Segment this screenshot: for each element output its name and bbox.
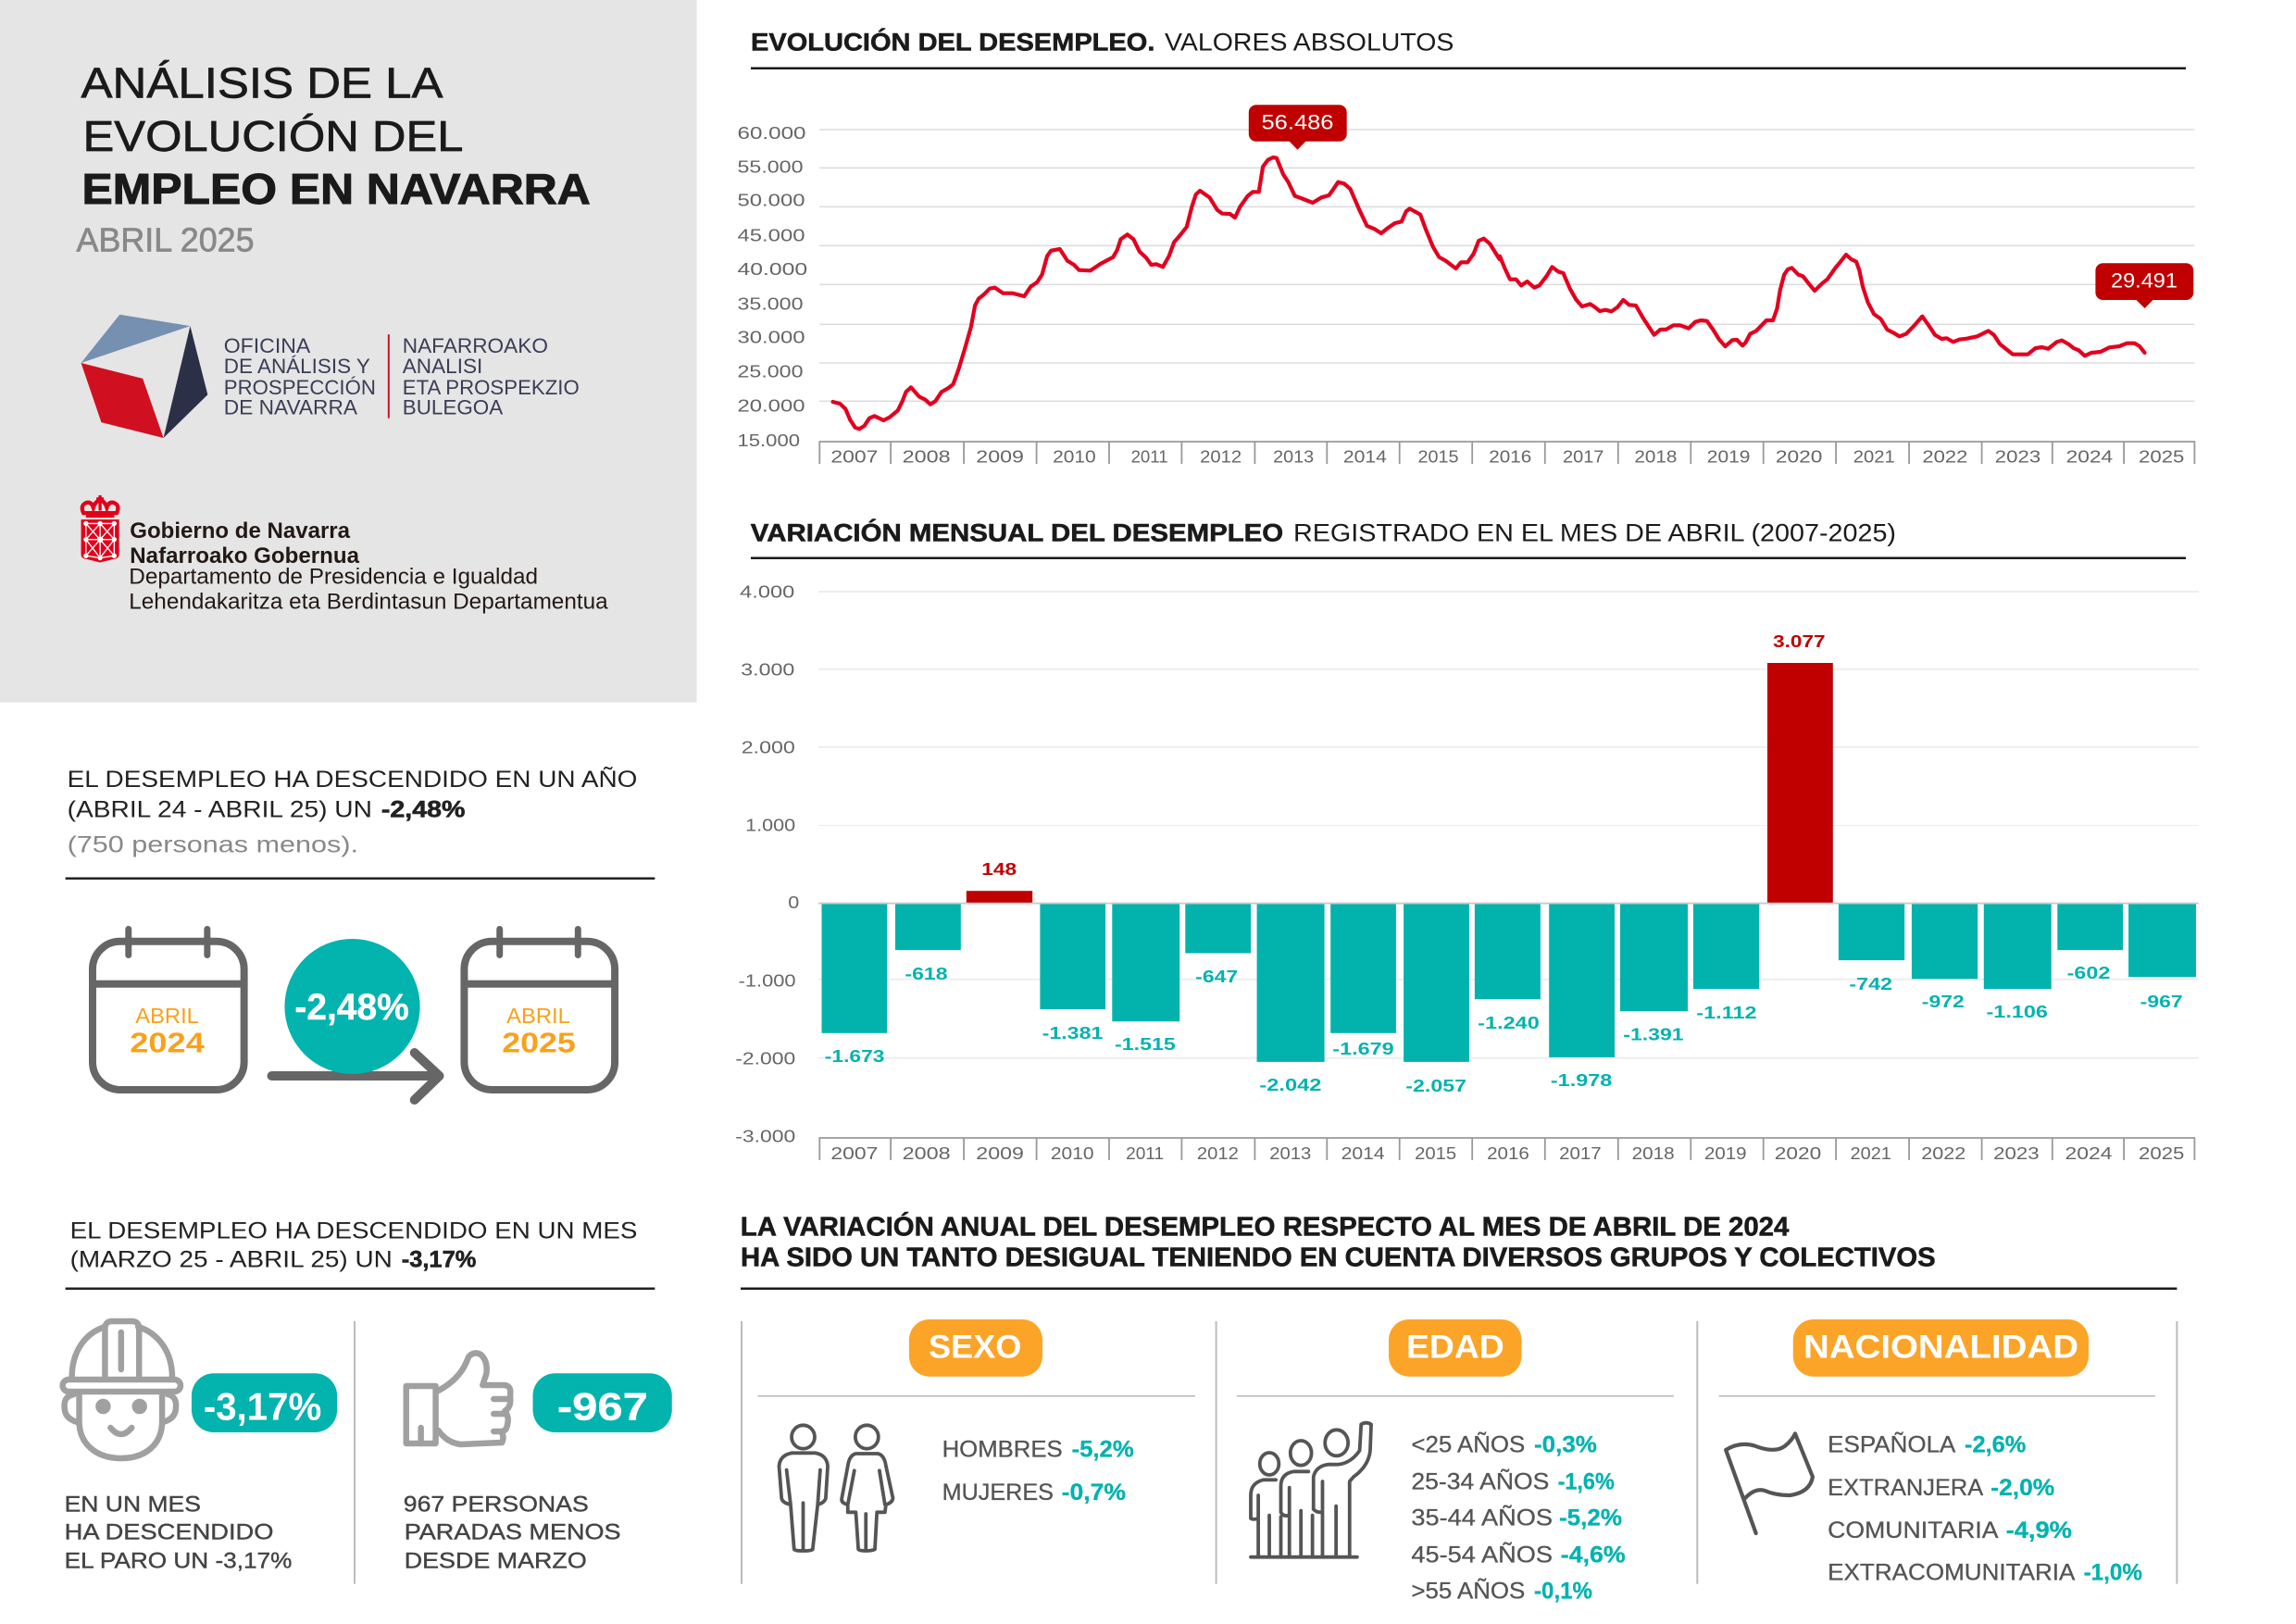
x axis with year ticks: 2009 <box>976 447 1024 466</box>
bar value labels: -618 <box>905 964 948 983</box>
x axis with year ticks: 2010 <box>1051 1143 1094 1163</box>
text block: sexo values: -0,7% <box>1062 1480 1126 1505</box>
icon: calendar April 2025 <box>464 926 617 1090</box>
y axis labels: -2.000 <box>735 1050 795 1068</box>
government name: Gobierno de Navarra <box>130 518 351 543</box>
title: EVOLUCIÓN DEL <box>83 112 463 160</box>
text block: edad values: 35-44 AÑOS <box>1411 1505 1553 1531</box>
text block: sexo values: MUJERES <box>942 1480 1054 1505</box>
icon: calendar April 2025: 2025 <box>502 1027 576 1059</box>
text block: edad values: <25 AÑOS <box>1411 1430 1525 1457</box>
text block: monthly people: PARADAS MENOS <box>405 1519 621 1544</box>
bar value labels: -967 <box>2140 992 2183 1011</box>
x axis with year ticks: 2022 <box>1922 447 1967 466</box>
bar value labels: 3.077 <box>1773 631 1826 651</box>
text block: edad values: >55 AÑOS <box>1411 1578 1525 1605</box>
text block: nacionalidad values: ESPAÑOLA <box>1828 1430 1956 1457</box>
text block: nacionalidad values: -4,9% <box>2006 1518 2072 1543</box>
y axis labels: 45.000 <box>737 226 805 244</box>
icon: calendar April 2024: ABRIL <box>135 1004 199 1028</box>
x axis with year ticks: 2021 <box>1850 1143 1891 1163</box>
x axis with year ticks: 2024 <box>2066 447 2113 466</box>
callout: latest value <box>2095 263 2193 308</box>
x axis with year ticks: 2019 <box>1707 447 1750 466</box>
x axis with year ticks: 2025 <box>2139 1143 2184 1163</box>
x axis with year ticks: 2012 <box>1200 447 1242 466</box>
bar value labels: -2.042 <box>1259 1075 1321 1094</box>
y axis labels: 60.000 <box>737 124 805 143</box>
x axis with year ticks <box>819 442 2194 466</box>
heading: monthly variation: REGISTRADO EN EL MES DE ABRIL (2007-2025) <box>1293 518 1896 546</box>
x axis with year ticks: 2017 <box>1563 447 1603 466</box>
bar chart: monthly variation <box>735 583 2199 1163</box>
government name: Nafarroako Gobernua <box>130 543 360 568</box>
y axis labels: 20.000 <box>737 397 805 416</box>
x axis with year ticks: 2015 <box>1415 1143 1456 1163</box>
badge: percentage <box>192 1373 337 1432</box>
text block: nacionalidad values: -2,0% <box>1990 1475 2054 1501</box>
text block: edad values: 45-54 AÑOS <box>1411 1541 1553 1568</box>
x axis with year ticks <box>819 1138 2194 1163</box>
government name: Departamento de Presidencia e Igualdad <box>129 565 538 590</box>
government name: Lehendakaritza eta Berdintasun Departamentua <box>129 590 608 615</box>
title <box>81 58 591 213</box>
x axis with year ticks: 2007 <box>830 1143 878 1163</box>
y axis labels: 1.000 <box>745 817 795 835</box>
bar value labels: -1.515 <box>1115 1034 1176 1054</box>
text block: edad values: -4,6% <box>1561 1542 1626 1568</box>
office name: BULEGOA <box>403 396 503 419</box>
text block: edad values <box>1411 1430 1626 1605</box>
office name <box>224 334 580 419</box>
bar value labels: -647 <box>1195 967 1238 986</box>
date subtitle: ABRIL 2025 <box>77 222 255 259</box>
x axis with year ticks: 2014 <box>1341 1143 1385 1163</box>
text block: monthly people: 967 PERSONAS <box>404 1492 589 1517</box>
arrow and percentage circle <box>271 939 440 1100</box>
x axis with year ticks: 2011 <box>1131 447 1168 466</box>
office name: ETA PROSPEKZIO <box>403 376 580 399</box>
x axis with year ticks: 2023 <box>1993 1143 2040 1163</box>
bar value labels: -972 <box>1922 992 1965 1011</box>
y axis labels <box>737 124 807 450</box>
bar value labels: 148 <box>981 859 1017 879</box>
text block: yearly summary: (750 personas menos). <box>68 832 358 858</box>
heading: monthly variation: VARIACIÓN MENSUAL DEL DESEMPLEO <box>751 518 1283 546</box>
text block: monthly summary <box>66 1218 655 1290</box>
x axis with year ticks: 2024 <box>2065 1143 2113 1163</box>
text block: monthly percent: EN UN MES <box>65 1492 201 1517</box>
text block: edad values: -0,3% <box>1534 1431 1597 1457</box>
red bars <box>967 663 1833 903</box>
text block: edad values: 25-34 AÑOS <box>1411 1468 1549 1494</box>
bar value labels: -1.112 <box>1696 1003 1757 1022</box>
text block: edad values: -0,1% <box>1534 1579 1592 1605</box>
badge: edad <box>1389 1319 1522 1377</box>
badge: nacionalidad: NACIONALIDAD <box>1803 1330 2078 1365</box>
badge: sexo <box>909 1319 1042 1377</box>
callout: peak value <box>1249 105 1347 150</box>
data line <box>833 157 2145 429</box>
text block: monthly percent: EL PARO UN -3,17% <box>65 1549 292 1574</box>
y axis labels: 40.000 <box>737 260 807 279</box>
icon: Navarra coat of arms <box>81 495 119 563</box>
y axis labels <box>735 583 799 1145</box>
title: EMPLEO EN NAVARRA <box>82 165 591 213</box>
x axis with year ticks: 2009 <box>976 1143 1024 1163</box>
heading: annual variation by groups: LA VARIACIÓN ANUAL DEL DESEMPLEO RESPECTO AL MES DE ABRIL DE 2024 <box>741 1213 1790 1243</box>
x axis with year ticks: 2012 <box>1197 1143 1239 1163</box>
line chart: unemployment evolution <box>737 105 2194 466</box>
text block: nacionalidad values: EXTRACOMUNITARIA <box>1828 1560 2076 1586</box>
x axis with year ticks: 2013 <box>1273 447 1314 466</box>
text block: monthly percent: HA DESCENDIDO <box>65 1519 273 1544</box>
text block: yearly summary <box>66 766 655 880</box>
x axis with year ticks: 2018 <box>1634 447 1677 466</box>
text block: yearly summary: EL DESEMPLEO HA DESCENDIDO EN UN AÑO <box>68 766 637 793</box>
badge: nacionalidad <box>1793 1319 2089 1377</box>
x axis with year ticks: 2007 <box>830 447 878 466</box>
x axis with year ticks: 2010 <box>1053 447 1096 466</box>
x axis with year ticks: 2021 <box>1853 447 1895 466</box>
x axis with year ticks: 2020 <box>1776 447 1822 466</box>
text block: nacionalidad values: -1,0% <box>2084 1560 2142 1586</box>
office name: DE ANÁLISIS Y <box>224 355 370 378</box>
x axis with year ticks: 2008 <box>903 1143 951 1163</box>
y axis labels: 3.000 <box>741 661 794 680</box>
y axis labels: 35.000 <box>737 294 804 313</box>
bar value labels: -1.679 <box>1332 1039 1394 1058</box>
y axis labels: -3.000 <box>735 1127 795 1145</box>
government name <box>129 518 608 615</box>
text block: sexo values: -5,2% <box>1072 1436 1134 1462</box>
text block: monthly percent <box>65 1492 292 1574</box>
x axis with year ticks: 2008 <box>903 447 951 466</box>
callout: peak value: 56.486 <box>1261 110 1333 133</box>
office name: OFICINA <box>224 334 310 357</box>
bar value labels: -1.240 <box>1478 1013 1540 1032</box>
y axis labels: 4.000 <box>740 583 794 602</box>
x axis with year ticks: 2016 <box>1487 1143 1529 1163</box>
text block: nacionalidad values: -2,6% <box>1965 1431 2026 1457</box>
text block: nacionalidad values <box>1828 1430 2142 1586</box>
badge: sexo: SEXO <box>929 1330 1021 1365</box>
text block: monthly summary: (MARZO 25 - ABRIL 25) UN <box>70 1247 393 1273</box>
y axis labels: -1.000 <box>739 971 796 990</box>
y axis labels: 30.000 <box>737 329 805 347</box>
callout: latest value: 29.491 <box>2111 269 2177 293</box>
y axis labels: 0 <box>788 893 799 912</box>
y axis labels: 50.000 <box>737 191 805 209</box>
x axis with year ticks: 2023 <box>1995 447 2040 466</box>
text block: yearly summary: (ABRIL 24 - ABRIL 25) UN <box>68 797 372 823</box>
x axis with year ticks: 2016 <box>1489 447 1531 466</box>
bar value labels: -602 <box>2067 963 2110 982</box>
x axis with year ticks: 2025 <box>2139 447 2184 466</box>
text block: monthly people: DESDE MARZO <box>405 1549 587 1574</box>
text block: edad values: -1,6% <box>1558 1468 1615 1494</box>
icon: calendar April 2024: 2024 <box>130 1027 206 1059</box>
badge: edad: EDAD <box>1406 1330 1504 1365</box>
teal bars <box>822 904 2196 1062</box>
bar value labels: -1.106 <box>1987 1002 2048 1021</box>
x axis with year ticks: 2018 <box>1632 1143 1675 1163</box>
x axis with year ticks: 2015 <box>1418 447 1459 466</box>
icon: worker with helmet <box>63 1321 181 1458</box>
text block: yearly summary: -2,48% <box>381 797 465 823</box>
y axis labels: 25.000 <box>737 363 804 381</box>
icon: man and woman <box>779 1425 893 1551</box>
badge: people count: -967 <box>557 1384 648 1428</box>
text block: monthly people <box>404 1492 621 1574</box>
y axis labels: 55.000 <box>737 157 804 176</box>
text block: monthly summary: EL DESEMPLEO HA DESCENDIDO EN UN MES <box>70 1218 637 1243</box>
bar value labels: -1.381 <box>1042 1023 1103 1043</box>
icon: calendar April 2024 <box>92 926 245 1090</box>
bar value labels: -1.673 <box>825 1046 885 1066</box>
office name: NAFARROAKO <box>403 334 548 357</box>
icon: thumbs up <box>406 1353 510 1444</box>
office name: ANALISI <box>403 355 482 378</box>
text block: sexo values: HOMBRES <box>942 1436 1063 1462</box>
icon: group of people <box>1251 1423 1371 1557</box>
icon: office logo <box>81 315 207 438</box>
bar value labels: -2.057 <box>1405 1076 1466 1095</box>
heading: annual variation by groups: HA SIDO UN TANTO DESIGUAL TENIENDO EN CUENTA DIVERSOS GRUPOS Y COLECTIVOS <box>741 1243 1936 1273</box>
icon: flag <box>1726 1433 1813 1533</box>
panel: monthly change <box>63 1218 672 1584</box>
x axis with year ticks: 2022 <box>1921 1143 1965 1163</box>
office name: DE NAVARRA <box>224 396 357 419</box>
text block: nacionalidad values: COMUNITARIA <box>1828 1518 1999 1543</box>
heading: annual variation by groups <box>741 1213 2177 1290</box>
badge: people count <box>533 1373 672 1432</box>
heading: monthly variation <box>751 518 2186 559</box>
bar value labels: -1.978 <box>1551 1070 1612 1090</box>
title: ANÁLISIS DE LA <box>81 58 443 106</box>
y axis labels: 2.000 <box>742 739 795 757</box>
icon: calendar April 2025: ABRIL <box>506 1004 570 1028</box>
badge: percentage: -3,17% <box>204 1384 321 1428</box>
heading: absolute unemployment: EVOLUCIÓN DEL DESEMPLEO. <box>751 27 1154 56</box>
bar value labels: -1.391 <box>1623 1024 1684 1043</box>
panel: groups and collectives <box>741 1213 2177 1605</box>
bar value labels <box>825 631 2183 1095</box>
office name: PROSPECCIÓN <box>224 376 376 399</box>
heading: absolute unemployment: VALORES ABSOLUTOS <box>1165 28 1454 56</box>
text block: edad values: -5,2% <box>1559 1505 1622 1531</box>
x axis with year ticks: 2014 <box>1343 447 1387 466</box>
text block: sexo values <box>942 1436 1134 1505</box>
x axis with year ticks: 2011 <box>1126 1143 1164 1163</box>
text block: nacionalidad values: EXTRANJERA <box>1828 1475 1984 1501</box>
panel: yearly change <box>66 766 655 1100</box>
heading: absolute unemployment <box>751 27 2186 69</box>
x axis with year ticks: 2020 <box>1775 1143 1821 1163</box>
arrow and percentage circle: -2,48% <box>294 987 409 1028</box>
x axis with year ticks: 2013 <box>1269 1143 1311 1163</box>
y axis labels: 15.000 <box>737 431 800 450</box>
text block: monthly summary: -3,17% <box>402 1247 476 1273</box>
x axis with year ticks: 2019 <box>1704 1143 1746 1163</box>
x axis with year ticks: 2017 <box>1559 1143 1602 1163</box>
bar value labels: -742 <box>1849 974 1892 993</box>
panel: title and logos <box>0 0 697 703</box>
